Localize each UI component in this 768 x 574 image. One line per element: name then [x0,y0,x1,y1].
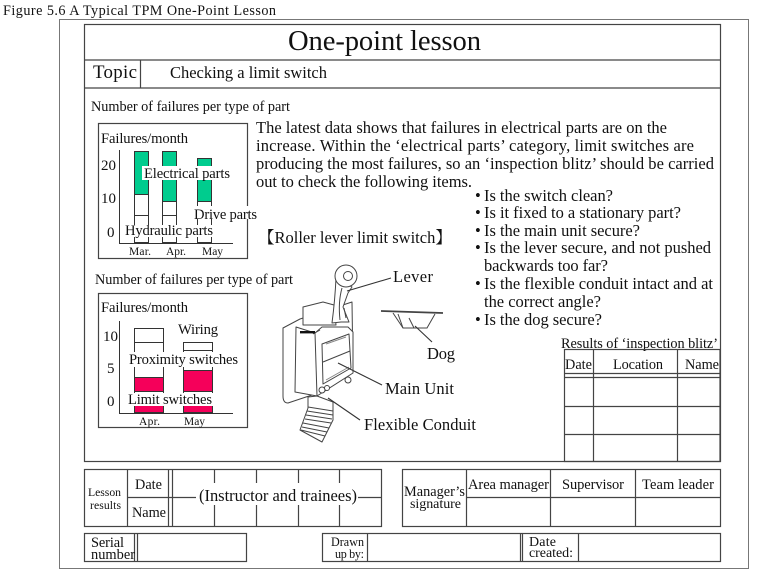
flexible conduit [300,396,333,442]
manager signature table: Supervisor [562,477,624,493]
chart heading: bottom: Number of failures per type of part [95,272,293,288]
lesson results table: Lesson [88,486,121,499]
screws [319,387,325,393]
figure caption: Figure 5.6 A Typical TPM One-Point Lesson [3,3,276,19]
switch head [303,302,336,325]
bar chart: failures by part type: Apr. [166,246,186,258]
checklist: • [475,310,481,329]
label: lever: Lever [393,267,434,286]
drawn up by and date created box: up by: [335,547,364,561]
serial number box: Serial [91,535,124,551]
chart heading: top: Number of failures per type of part [91,99,290,115]
bar chart: electrical failures: Failures/month [101,300,189,316]
bar chart: failures by part type: Hydraulic parts [125,223,213,239]
bar chart: electrical failures: Apr. [139,416,160,428]
results table heading: Results of ‘inspection blitz’ [561,336,718,352]
checklist: • [475,186,481,205]
checklist: • [475,238,481,257]
checklist: Is the lever secure, and not pushed [484,238,712,257]
results table: Name [685,357,719,373]
bar chart: failures by part type: 10 [101,191,116,207]
lever arm [332,278,352,323]
drawn up by and date created box: Date [529,535,556,550]
results table: Location [613,357,663,373]
illustration: dog [381,311,443,328]
checklist [475,186,713,329]
checklist: backwards too far? [484,256,608,275]
serial number box [84,533,246,563]
bar chart: failures by part type: Failures/month [101,131,189,147]
leader lines [328,278,432,420]
illustration: roller lever limit switch [283,265,357,442]
topic label: Topic [93,62,137,83]
main lesson panel [84,24,720,462]
main body [295,327,353,396]
bar chart: failures by part type: May [202,246,223,258]
bar chart: electrical failures: 10 [103,329,118,345]
checklist: Is it fixed to a stationary part? [484,203,681,222]
manager signature table: signature [410,497,461,512]
illustration heading: 【Roller lever limit switch】 [258,228,452,247]
checklist: Is the main unit secure? [484,221,640,240]
bar chart: failures by part type: Electrical parts [144,166,230,182]
body paragraph: producing the most failures, so an ‘inspection blitz’ should be carried [256,154,715,173]
bar chart: failures by part type [98,124,257,258]
topic text: Checking a limit switch [170,63,328,82]
window [322,334,351,384]
label: dog: Dog [427,344,455,363]
black mark [300,331,315,333]
checklist: Is the flexible conduit intact and at [484,274,713,293]
body paragraph: out to check the following items. [256,172,472,191]
back plate [283,302,353,403]
bar chart: electrical failures: 0 [107,394,114,410]
serial number box: number [91,547,135,563]
body paragraph: increase. Within the ‘electrical parts’ category, limit switches are [256,136,694,155]
checklist: • [475,274,481,293]
bar chart: electrical failures: Limit switches [128,392,212,408]
checklist: Is the switch clean? [484,186,613,205]
lesson results table: Date [135,477,162,493]
manager signature table [402,469,720,526]
checklist: • [475,221,481,240]
bar chart: electrical failures: Proximity switches [129,352,238,368]
lesson results table: (Instructor and trainees) [199,486,357,505]
body paragraph [256,118,715,191]
bar chart: failures by part type: 20 [101,158,116,174]
bar chart: electrical failures: Wiring [178,322,219,338]
bar chart: electrical failures: 5 [107,361,114,377]
bar chart: electrical failures [98,294,248,428]
lesson results table: Name [132,505,166,521]
drawn up by and date created box: Drawn [331,535,364,549]
bar chart: electrical failures: May [184,416,205,428]
manager signature table: Team leader [642,477,714,493]
label: main unit: Main Unit [385,379,454,398]
body paragraph: The latest data shows that failures in electrical parts are on the [256,118,667,137]
drawn up by and date created box: created: [529,546,573,561]
bar chart: failures by part type: Drive parts [194,207,257,223]
manager signature table: Area manager [468,477,549,493]
bar chart: failures by part type: 0 [107,225,114,241]
results table [564,349,720,462]
checklist: the correct angle? [484,292,601,311]
checklist: • [475,203,481,222]
lesson results table [84,469,382,526]
label: flexible conduit: Flexible Conduit [364,415,476,434]
drawn up by and date created box [322,533,720,562]
results table: Date [565,357,592,373]
bar chart: failures by part type: Mar. [129,246,151,258]
title: One-point lesson [288,26,481,57]
checklist: Is the dog secure? [484,310,602,329]
lesson results table: results [90,499,121,512]
manager signature table: Manager’s [404,484,465,500]
